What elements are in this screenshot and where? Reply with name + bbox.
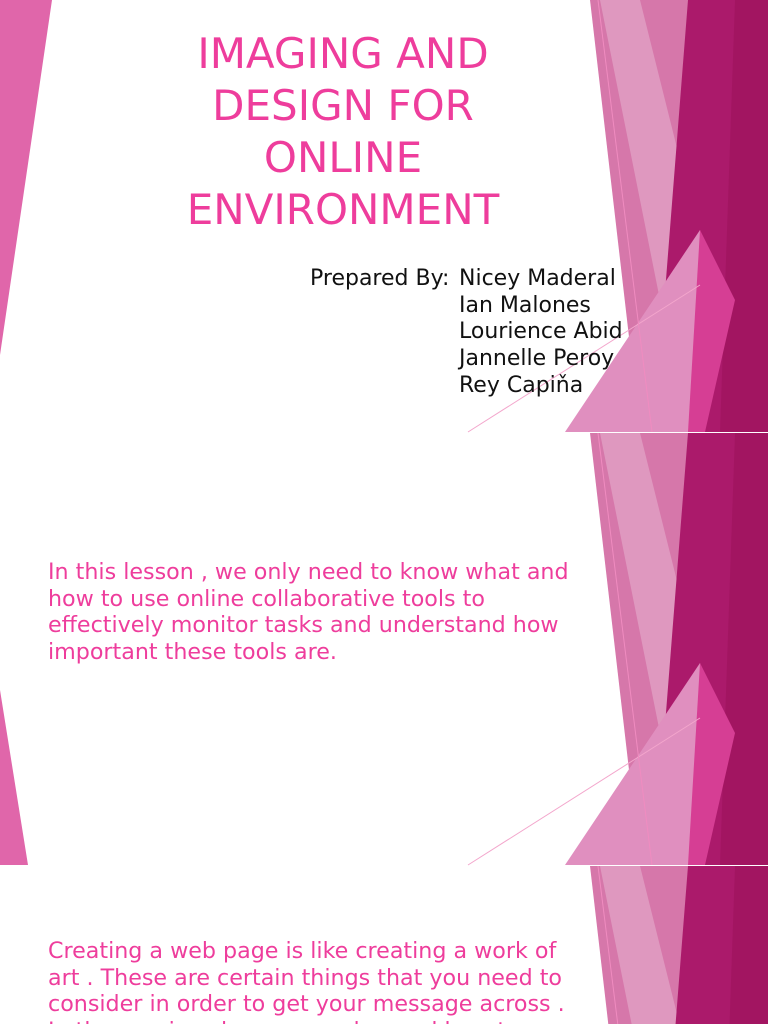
lesson text: important these tools are. (48, 638, 337, 664)
decoration: pink triangles (0, 0, 768, 432)
body text: Creating a web page is like creating a work of (48, 938, 556, 964)
body text: consider in order to get your message across . (48, 991, 565, 1017)
lesson text: effectively monitor tasks and understand how (48, 612, 559, 638)
slide 2: lesson intro (0, 433, 768, 866)
decoration: pink triangles (0, 433, 768, 866)
slide 3: web page art (0, 866, 768, 1024)
prepared by: Prepared By: (310, 266, 449, 291)
title (187, 29, 500, 234)
names list (458, 266, 623, 398)
body text (48, 938, 565, 1024)
lesson text: how to use online collaborative tools to (48, 586, 485, 612)
names list: Nicey Maderal (459, 266, 616, 291)
names list: Lourience Abid (459, 319, 623, 344)
title: DESIGN FOR (212, 81, 474, 130)
title: ONLINE (264, 133, 422, 182)
lesson text (48, 559, 569, 664)
decoration: pink triangles (590, 866, 768, 1024)
title: IMAGING AND (197, 29, 489, 78)
names list: Ian Malones (459, 293, 591, 318)
lesson text: In this lesson , we only need to know what and (48, 559, 569, 585)
names list: Jannelle Peroy (459, 346, 614, 371)
slide 1: title slide (0, 0, 768, 433)
title: ENVIRONMENT (187, 185, 499, 234)
body text: art . These are certain things that you need to (48, 964, 562, 990)
names list: Rey Capiňa (459, 373, 583, 398)
